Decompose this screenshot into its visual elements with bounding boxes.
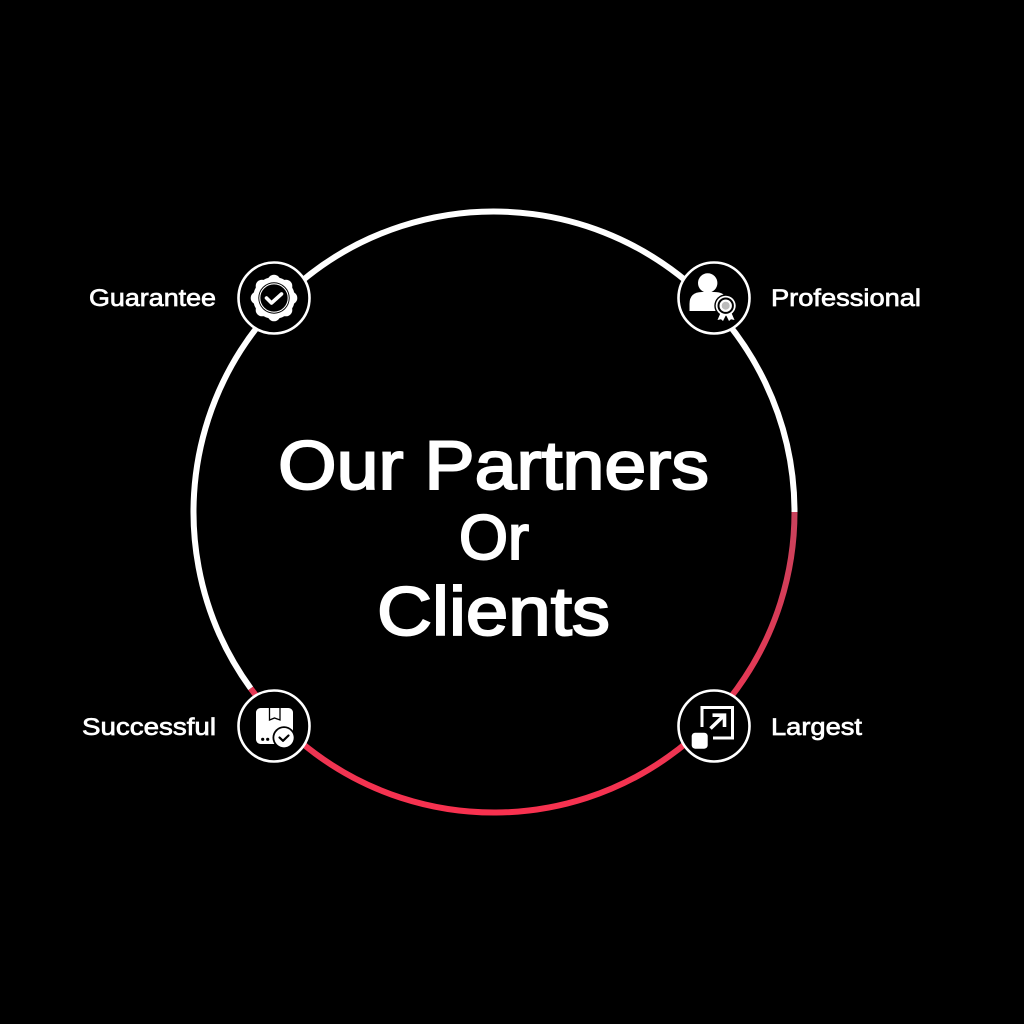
- icon: successful delivered box: [238, 690, 310, 762]
- white arc: [193, 212, 794, 688]
- red arc: [251, 512, 794, 813]
- label: Largest: Largest: [771, 714, 862, 741]
- icon: largest expand arrow: [678, 690, 750, 762]
- title: [278, 427, 709, 650]
- title: Clients: [377, 573, 610, 650]
- label: Guarantee: Guarantee: [89, 285, 216, 312]
- label: Successful: Successful: [82, 714, 216, 741]
- title: Or: [459, 503, 529, 573]
- ring: white and red arcs: [193, 212, 794, 813]
- label: Professional: Professional: [771, 285, 921, 312]
- icon: guarantee badge: [238, 262, 310, 334]
- icon: professional person with rosette: [678, 262, 750, 334]
- title: Our Partners: [278, 427, 709, 504]
